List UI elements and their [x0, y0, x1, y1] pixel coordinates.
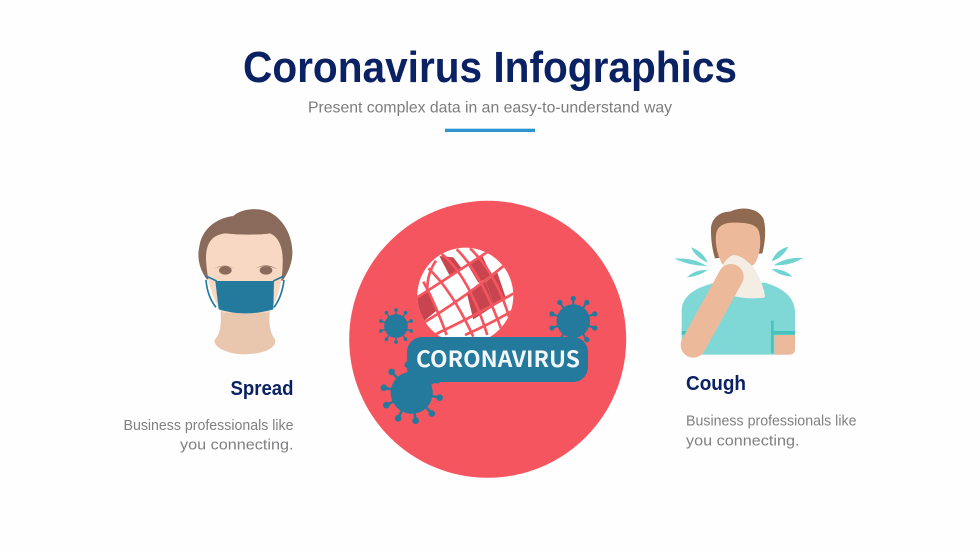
icon: small virus left	[379, 308, 413, 344]
banner label: CORONAVIRUS	[416, 342, 580, 374]
coronavirus banner	[407, 337, 588, 382]
icon: man wearing face mask	[198, 209, 292, 354]
red circle	[349, 201, 626, 478]
heading: spread: Spread	[230, 378, 294, 400]
icon: virus right	[549, 296, 597, 346]
body: spread line 1: Business professionals like	[124, 417, 294, 434]
icon: globe	[417, 248, 514, 337]
infographic canvas	[124, 50, 856, 478]
icon: large virus bottom left	[377, 357, 446, 428]
title underline	[445, 129, 535, 132]
title: Coronavirus Infographics	[243, 43, 737, 92]
body: cough line 1: Business professionals like	[686, 413, 856, 430]
subtitle: Present complex data in an easy-to-understand way	[308, 100, 672, 116]
text block: spread	[124, 378, 294, 454]
icon: man coughing into tissue	[674, 208, 803, 355]
body: cough line 2: you connecting.	[686, 432, 800, 449]
heading: cough: Cough	[686, 373, 746, 395]
panel: central coronavirus badge	[349, 201, 626, 478]
body: spread line 2: you connecting.	[180, 436, 294, 454]
text block: cough	[686, 373, 856, 449]
